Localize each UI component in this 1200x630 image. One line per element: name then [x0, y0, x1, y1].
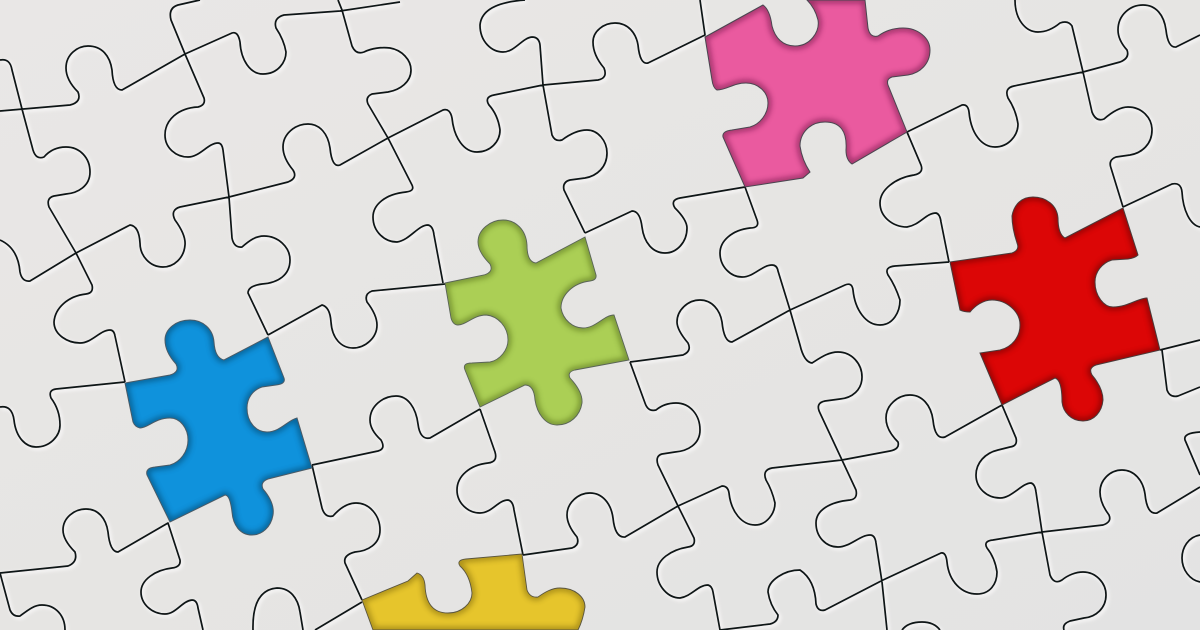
hole: pink piece	[705, 0, 930, 187]
hole: red piece	[950, 197, 1160, 421]
hole: blue piece	[125, 320, 312, 535]
hole: green piece	[445, 220, 629, 425]
hole: yellow piece	[362, 554, 585, 630]
